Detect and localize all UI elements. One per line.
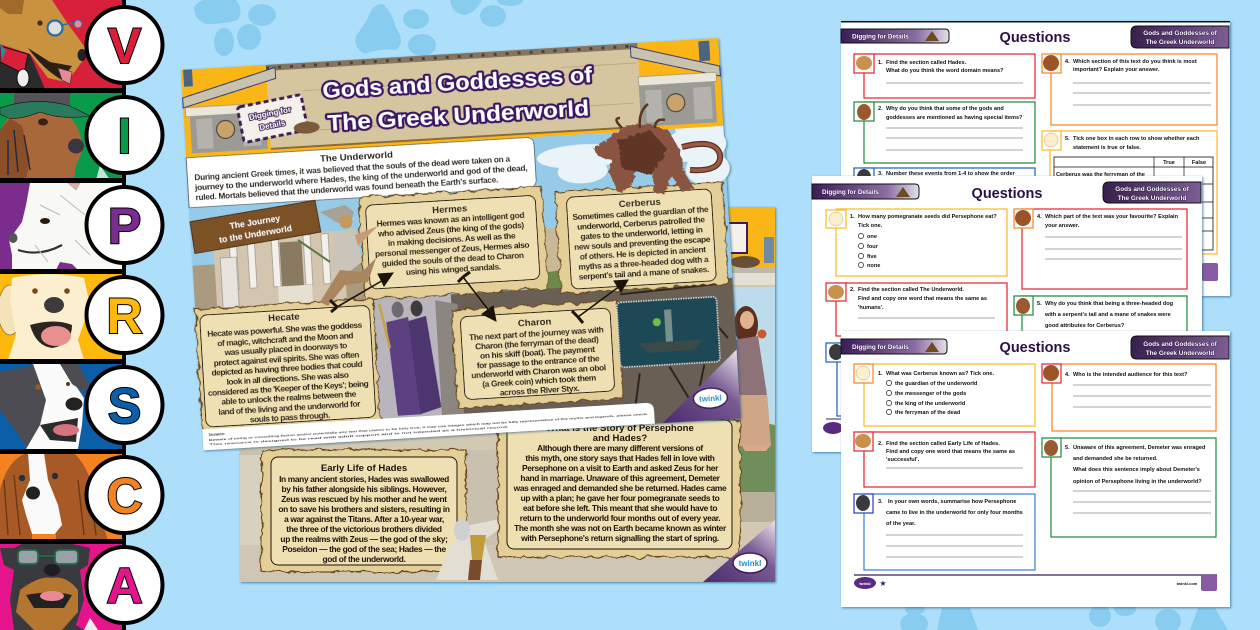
question 3 box: 3. — [878, 499, 883, 505]
disclaimer strip: Beware of using or consulting fiction and/or potentially any text that claims to be fully true; it may use images which may not be fully representative of the myths and legends, please check. — [209, 412, 649, 442]
panel: hecate: depicted as having three bodies that could — [211, 359, 363, 378]
question 3 box — [854, 494, 1035, 570]
worksheet 3 header — [841, 336, 1229, 359]
panel: what is the story of persephone and hades: this myth, one story says that Hades fell in love with — [525, 453, 715, 463]
letter S: S — [108, 378, 141, 434]
right temple — [630, 40, 723, 127]
panel: early life of hades: the three of the victorious brothers divided — [286, 524, 442, 534]
panel: what is the story of persephone and hades: hand in marriage. Unaware of this agreement, Demeter — [520, 473, 721, 483]
question 2 box: 2. — [878, 441, 883, 447]
band R: yellow with golden retriever — [0, 274, 123, 360]
panel: cerberus: myths as a three-headed dog with a — [578, 254, 709, 272]
question 4 box — [1042, 54, 1217, 125]
panel: cerberus: serpent's tail and a mane of snakes. — [578, 264, 709, 282]
question 2 box: Find and copy one word that means the same as — [858, 296, 987, 302]
question 2 box: 'successful'. — [886, 457, 920, 463]
panel: hermes: Hermes — [432, 203, 468, 216]
panel: early life of hades: on to save his brothers and sisters, resulting in — [278, 504, 450, 514]
question 5 box: and demanded she be returned. — [1073, 456, 1158, 462]
question 4 box: 4. — [1065, 59, 1070, 65]
question 2 box — [854, 102, 1035, 163]
twinkl corner on back poster — [703, 520, 775, 582]
question 1 box: the king of the underworld — [895, 401, 966, 407]
arrow: charon to cerberus — [572, 280, 628, 323]
worksheet 2 header — [812, 182, 1201, 203]
letter I — [86, 97, 162, 173]
question 4 box: Which part of the text was your favourite? Explain — [1045, 214, 1179, 220]
panel: early life of hades: Early Life of Hades — [321, 463, 407, 474]
back poster page — [240, 207, 775, 582]
question 4 box: 4. — [1065, 372, 1070, 378]
left temple — [181, 64, 280, 154]
question 5 box: 5. — [1065, 445, 1070, 451]
band A: pink with rottweiler in glasses — [0, 543, 123, 630]
question 3 box — [826, 343, 1007, 416]
letter P — [86, 187, 162, 263]
panel: the underworld intro: ruled. Mortals believed that the underworld was found beneath the Earth's surface. — [195, 175, 498, 202]
question 5 box: opinion of Persephone living in the underworld? — [1073, 479, 1202, 485]
panel: hecate — [195, 299, 380, 431]
panel: what is the story of persephone and hades: Persephone on a visit to Earth and asked Zeus for her — [522, 463, 719, 473]
panel: hermes: Hermes was known as an intelligent god — [376, 210, 525, 229]
hecate figures — [379, 299, 442, 416]
panel: what is the story of persephone and hades: Although there are many different versions of — [537, 443, 703, 453]
hermes figure — [298, 205, 378, 306]
panel: charon: Charon (the ferryman of the dead) — [475, 334, 599, 352]
panel: hecate: of magic, witchcraft and the Moon and — [217, 330, 354, 348]
question 5 box with table: statement is true or false. — [1073, 145, 1141, 151]
arrow: hermes to charon — [458, 272, 496, 321]
band C: orange with spaniel — [0, 453, 123, 540]
panel: cerberus: gates to the underworld, letting in — [580, 224, 703, 242]
question 2 box — [854, 432, 1035, 487]
panel: hermes: in making decisions. As well as the — [388, 230, 516, 248]
persephone figure — [731, 306, 771, 451]
question 5 box: good attributes for Cerberus? — [1045, 323, 1125, 329]
panel: early life of hades: up the realms with Zeus — the god of the sky; — [280, 534, 448, 544]
panel: cerberus: of others. He is depicted in ancient — [579, 244, 706, 262]
panel: cerberus: underworld, Cerberus patrolled the — [577, 214, 706, 232]
panel: cerberus: Sometimes called the guardian of the — [572, 204, 709, 222]
worksheet 3 header: Gods and Goddesses of — [1143, 341, 1218, 348]
digging for details badge: Digging for — [248, 105, 292, 122]
question 2 box: Find and copy one word that means the same as — [886, 449, 1015, 455]
question 1 box: the guardian of the underworld — [895, 381, 978, 387]
worksheet 3 footer — [854, 575, 1217, 591]
panel: early life of hades — [262, 450, 466, 572]
question 1 box — [826, 209, 1007, 276]
panel: what is the story of persephone and hades: was enraged and demanded she be returned. Hades came — [513, 483, 727, 493]
picture: charon on the river styx — [617, 297, 720, 367]
question 1 box — [854, 54, 1035, 98]
twinkl corner on back poster: twinkl — [739, 559, 761, 568]
letter A — [86, 547, 162, 623]
letter R — [86, 277, 162, 353]
question 4 box: your answer. — [1045, 223, 1080, 229]
front poster page — [181, 38, 745, 450]
panel: hermes: guided the souls of the dead to Charon — [381, 250, 524, 268]
zeus figure — [436, 518, 507, 580]
worksheet 1 header — [841, 26, 1229, 48]
panel: cerberus: Cerberus — [618, 197, 661, 210]
question 5 box: Unaware of this agreement, Demeter was enraged — [1073, 445, 1206, 451]
question 1 box: the messenger of the gods — [895, 391, 966, 397]
temple scene — [191, 214, 635, 316]
letter S — [86, 367, 162, 443]
panel: hecate: Hecate was powerful. She was the goddess — [207, 320, 363, 339]
panel: hecate: land of the living and the underworld for — [218, 398, 361, 417]
band V: red with dog in glasses — [0, 0, 123, 89]
question 5 box with table: Cerberus was the ferryman of the — [1056, 172, 1145, 178]
panel: early life of hades: by his father alongside his siblings. However, — [282, 484, 446, 494]
panel: hermes: using his winged sandals. — [406, 261, 501, 277]
digging for details badge: Details — [259, 118, 287, 132]
panel: charon: on his skiff (boat). The payment — [480, 344, 596, 361]
worksheet 2 header: Questions — [972, 186, 1042, 202]
question 3 box — [854, 168, 1035, 198]
question 1 box — [854, 364, 1035, 426]
worksheet 3 footer: twinkl — [859, 581, 871, 586]
question 5 box: 5. — [1037, 301, 1042, 307]
panel: early life of hades: Zeus was rescued by his mother and he went — [281, 494, 447, 504]
question 1 box: four — [867, 244, 879, 250]
worksheet 1 header: The Greek Underworld — [1146, 39, 1214, 46]
worksheet 2 header: Gods and Goddesses of — [1115, 186, 1190, 193]
question 1 box: one — [867, 234, 877, 240]
arrow: hecate to hermes — [330, 273, 393, 312]
worksheet 1 header: Digging for Details — [852, 34, 909, 40]
panel: early life of hades: Poseidon — the god of the sea; Hades — the — [282, 544, 446, 554]
panel: charon — [452, 301, 623, 408]
question 5 box with table — [1042, 131, 1217, 254]
question 2 box: Find the section called Early Life of Hades. — [886, 441, 1000, 447]
worksheet 3 header: The Greek Underworld — [1146, 350, 1214, 357]
band separators — [0, 88, 123, 544]
question 4 box — [1042, 364, 1216, 431]
worksheet 3 header: Digging for Details — [852, 344, 909, 351]
band I: green with hound in hat — [0, 93, 123, 180]
panel: what is the story of persephone and hades: What is the Story of Persephone — [546, 423, 694, 434]
panel: the underworld intro: During ancient Greek times, it was believed that the souls of the dead were taken on a — [194, 155, 511, 182]
panel: the underworld intro: journey to the underworld where Hades, the king of the underworld and god of the dead, — [194, 164, 528, 192]
title — [322, 62, 595, 136]
header band — [181, 38, 723, 158]
panel: charon: Charon — [518, 316, 552, 329]
worksheet 3 — [841, 331, 1230, 607]
worksheet 2 footer — [823, 419, 1190, 434]
question 5 box: Why do you think that being a three-headed dog — [1045, 301, 1174, 307]
panel: what is the story of persephone and hades: and Hades? — [593, 433, 647, 444]
worksheet 2 header: Digging for Details — [822, 189, 879, 196]
VIPERS sidebar with dog bands — [0, 0, 162, 630]
worksheet 2 header: The Greek Underworld — [1118, 195, 1186, 202]
question 1 box: 1. — [850, 214, 855, 220]
panel: hecate: Hecate — [268, 311, 300, 324]
worksheet 3 footer: twinkl.com — [1177, 581, 1198, 586]
panel: what is the story of persephone and hades: with Persephone's return signalling the start of spring. — [520, 533, 719, 543]
cerberus figure — [593, 104, 720, 194]
panel: charon: The next part of the journey was with — [469, 324, 604, 342]
question 5 box: What does this sentence imply about Demeter's — [1073, 467, 1200, 473]
question 3 box: came to live in the underworld for only four months — [886, 510, 1023, 516]
question 1 box: 1. — [878, 371, 883, 377]
panel: cerberus: new souls and preventing the escape — [574, 234, 711, 252]
worksheet 1 — [841, 21, 1230, 296]
question 1 box: 1. — [878, 60, 883, 66]
question 2 box: 'humans'. — [858, 305, 884, 311]
band P: purple with white dog — [0, 183, 123, 270]
question 4 box: Who is the intended audience for this text? — [1073, 372, 1188, 378]
panel: early life of hades: god of the underworld. — [322, 554, 406, 564]
worksheet 1 footer logo — [1202, 263, 1218, 281]
question 3 box: In your own words, summarise how Persephone — [888, 499, 1016, 505]
panel: hecate: considered as the 'Keeper of the Keys'; being — [208, 378, 369, 398]
panel: hermes: personal messenger of Zeus, Hermes also — [375, 240, 530, 259]
question 1 box: the ferryman of the dead — [895, 410, 961, 416]
panel: what is the story of persephone and hades: The month she was not on Earth became known as winter — [514, 523, 727, 533]
letter A: A — [106, 558, 143, 614]
letter V: V — [108, 18, 142, 74]
panel: cerberus — [555, 182, 729, 294]
worksheet 3 header: Questions — [1000, 340, 1070, 356]
banner: the journey to the underworld: to the Underworld — [218, 223, 293, 245]
question 1 box: What was Cerberus known as? Tick one. — [886, 371, 995, 377]
letter I: I — [118, 108, 131, 164]
panel: charon: (a Greek coin) which took them — [482, 372, 596, 389]
question 1 box: How many pomegranate seeds did Persephone eat? — [858, 214, 997, 220]
worksheet 1 header: Gods and Goddesses of — [1143, 30, 1218, 37]
question 2 box: Why do you think that some of the gods and — [886, 106, 1004, 112]
question 2 box: Find the section called The Underworld. — [858, 287, 964, 293]
question 1 box: five — [867, 254, 877, 260]
panel: hecate: look in all directions. She was also — [226, 370, 349, 387]
question 2 box: 2. — [878, 106, 883, 112]
question 3 box: of the year. — [886, 521, 916, 527]
panel: what is the story of persephone and hades: up with a plan; he gave her four pomegranate seeds to — [521, 493, 720, 503]
panel: the underworld intro: The Underworld — [320, 150, 393, 165]
letter C: C — [106, 468, 143, 524]
title: Gods and Goddesses of — [322, 62, 593, 103]
disclaimer strip — [202, 403, 655, 450]
band S: blue with border collie — [0, 364, 123, 449]
disclaimer strip: This resource is designed to be read with adult support and is not intended as a historical record. — [209, 425, 510, 446]
twinkl corner on front poster: twinkl — [699, 394, 722, 404]
panel: hecate: protect against evil spirits. She was often — [213, 349, 360, 368]
question 5 box with table: True — [1163, 160, 1175, 166]
panel: early life of hades: a war against the Titans. After a 10-year war, — [284, 514, 444, 524]
cave rock background — [195, 278, 741, 450]
title: The Greek Underworld — [327, 95, 590, 136]
letter C — [86, 457, 162, 533]
question 5 box with table: False — [1192, 160, 1206, 166]
clouds — [536, 125, 731, 195]
question 2 box: goddesses are mentioned as having special items? — [886, 115, 1023, 121]
question 1 box: What do you think the word domain means? — [886, 68, 1004, 74]
panel: hecate: was usually placed in doorways to — [223, 340, 347, 358]
question 4 box — [1014, 209, 1187, 289]
worksheet 3 footer: ★ — [879, 579, 887, 588]
letter V — [86, 7, 162, 83]
question 4 box: important? Explain your answer. — [1073, 67, 1160, 73]
digging for details badge — [237, 94, 320, 143]
question 5 box with table: Tick one box in each row to show whether each — [1073, 136, 1200, 142]
worksheet 1 header: Questions — [1000, 30, 1070, 46]
panel: hermes: who advised Zeus (the king of the gods) — [377, 220, 525, 239]
panel: the underworld intro — [186, 137, 537, 208]
question 5 box: with a serpent's tail and a mane of snakes were — [1044, 312, 1171, 318]
question 2 box — [826, 283, 1007, 336]
question 3 box: Number these events from 1-4 to show the order — [886, 171, 1016, 177]
panel: hecate: able to unlock the realms between the — [221, 389, 357, 407]
panel: charon: underworld with Charon was an obol — [471, 362, 606, 380]
question 1 box: Find the section called Hades. — [886, 60, 967, 66]
panel: early life of hades: In many ancient stories, Hades was swallowed — [279, 474, 449, 484]
panel: what is the story of persephone and hades — [498, 420, 740, 557]
question 3 box: 3. — [878, 171, 883, 177]
twinkl corner on front poster — [659, 350, 741, 423]
question 2 box: 2. — [850, 287, 855, 293]
panel: charon: for passage to the entrance of the — [476, 353, 600, 370]
banner: the journey to the underworld: The Journey — [229, 213, 281, 231]
question 1 box: Tick one. — [858, 223, 883, 229]
banner: the journey to the underworld — [189, 200, 322, 254]
question 4 box: 4. — [1037, 214, 1042, 220]
panel: hecate: souls to pass through. — [250, 410, 330, 425]
question 5 box — [1014, 296, 1187, 345]
letter P: P — [108, 198, 141, 254]
letter R: R — [106, 288, 143, 344]
panel: what is the story of persephone and hades: eat before she left. This meant that she would have to — [523, 503, 717, 513]
worksheet 2 — [812, 176, 1202, 452]
question 5 box — [1042, 438, 1216, 537]
panel: what is the story of persephone and hades: return to the underworld four months out of every year. — [520, 513, 720, 523]
question 4 box: Which section of this text do you think is most — [1073, 59, 1197, 65]
panel: charon: across the River Styx. — [499, 383, 580, 398]
question 5 box with table: 5. — [1065, 136, 1070, 142]
disclaimer strip: Disclaimer — [209, 432, 226, 437]
panel: hermes — [359, 187, 548, 299]
question 1 box: none — [867, 263, 880, 269]
